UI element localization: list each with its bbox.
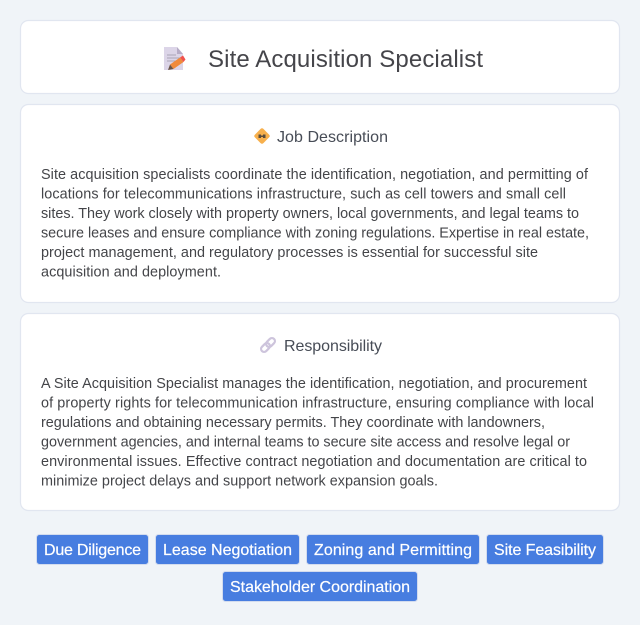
tag: Due Diligence (36, 534, 148, 564)
icon: document with pencil (164, 47, 186, 70)
panel: job description (20, 104, 620, 302)
tag: Lease Negotiation (156, 534, 300, 564)
text block: job description: Site acquisition specialists coordinate the identification, negotiation, and permitting of (41, 167, 589, 183)
tag: Stakeholder Coordination: Stakeholder Coordination (230, 579, 410, 596)
tag: Site Feasibility (486, 534, 604, 564)
heading: job description: Job Description (277, 129, 388, 146)
text block: job description: project management, and regulatory processes is essential for successful site (41, 245, 538, 261)
text block: responsibility: regulations and obtaining necessary permits. They coordinate with landowners, (41, 415, 545, 431)
tag: Zoning and Permitting: Zoning and Permitting (314, 542, 472, 559)
text block: job description: acquisition and deployment. (41, 264, 221, 280)
tag: Lease Negotiation: Lease Negotiation (163, 542, 292, 559)
panel: title (20, 20, 620, 94)
text block: responsibility: of property rights for telecommunication infrastructure, ensuring compliance with local (41, 396, 594, 412)
tag: Site Feasibility: Site Feasibility (494, 542, 596, 559)
heading: responsibility: Responsibility (284, 338, 382, 355)
text block: job description: secure leases and ensure compliance with zoning regulations. Expertise in real estate, (41, 226, 589, 242)
icon: orange diamond (254, 128, 270, 144)
icon: chain link (260, 337, 276, 353)
tag: Zoning and Permitting (306, 534, 480, 564)
text block: responsibility: minimize project delays and support network expansion goals. (41, 474, 438, 490)
text block: responsibility: environmental issues. Effective contract negotiation and documentation are critical to (41, 454, 587, 470)
text block: responsibility: government agencies, and internal teams to secure site access and resolve legal or (41, 434, 570, 450)
text block: job description (41, 167, 589, 280)
text block: job description: locations for telecommunications infrastructure, such as cell towers and small cell (41, 186, 566, 202)
text block: responsibility: A Site Acquisition Specialist manages the identification, negotiation, and procurement (41, 376, 587, 392)
tag: Due Diligence: Due Diligence (44, 542, 141, 559)
tag: Stakeholder Coordination (222, 572, 418, 602)
text block: responsibility (41, 376, 594, 490)
panel: responsibility (20, 314, 620, 510)
text block: job description: sites. They work closely with property owners, local governments, and legal teams to (41, 206, 579, 222)
heading: page title: Site Acquisition Specialist (208, 46, 483, 73)
